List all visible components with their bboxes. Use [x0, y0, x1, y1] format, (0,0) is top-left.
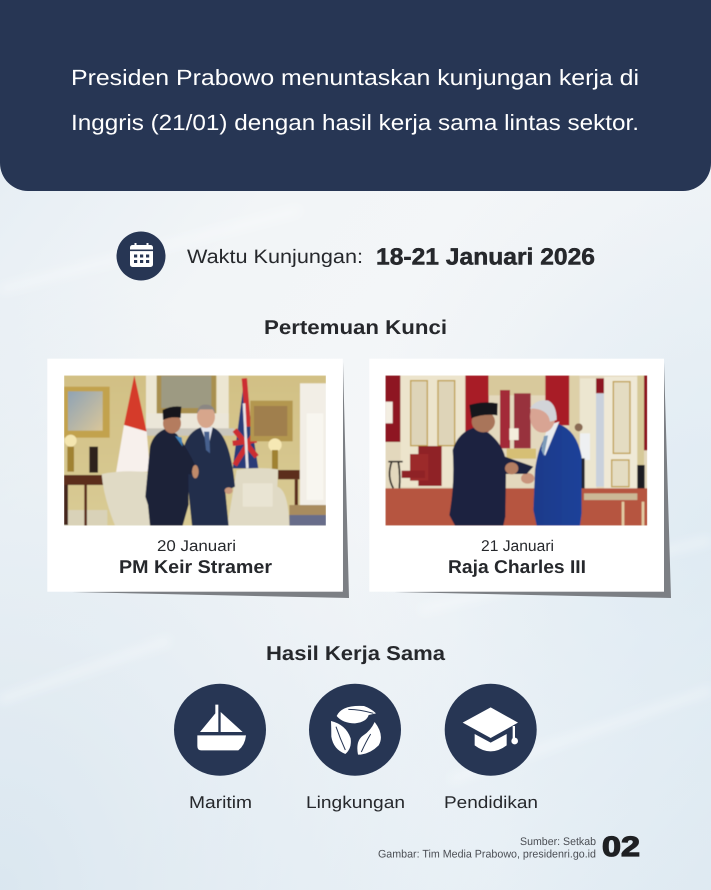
Prabowo	[449, 427, 533, 526]
heading: Pertemuan Kunci: Pertemuan Kunci	[264, 317, 447, 339]
header text: Inggris (21/01) dengan hasil kerja sama lintas sektor.	[71, 110, 639, 135]
source credits: Gambar: Tim Media Prabowo, presidenri.go.id	[378, 848, 596, 860]
icon: calendar	[116, 232, 166, 280]
visit label: Waktu Kunjungan:	[187, 246, 363, 268]
header text	[71, 65, 639, 135]
label: Pendidikan: Pendidikan	[444, 793, 538, 812]
icon: three leaves	[309, 684, 401, 776]
photo: Prabowo and Keir Starmer	[64, 375, 326, 526]
icon: graduation cap	[445, 684, 537, 776]
panel: meeting card 1	[47, 359, 349, 598]
caption name: PM Keir Stramer	[119, 556, 272, 577]
caption date: 20 Januari	[157, 538, 236, 555]
page number: 02	[602, 831, 640, 862]
photo: Prabowo and Raja Charles	[385, 375, 647, 526]
label: Lingkungan: Lingkungan	[306, 793, 405, 812]
man left	[145, 429, 195, 526]
header text: Presiden Prabowo menuntaskan kunjungan kerja di	[71, 65, 639, 90]
header banner	[0, 0, 711, 191]
panel: meeting card 2	[369, 359, 671, 598]
caption date: 21 Januari	[481, 538, 554, 555]
source credits	[378, 836, 596, 860]
visit dates: 18-21 Januari 2026	[376, 244, 595, 270]
source credits: Sumber: Setkab	[520, 836, 596, 848]
label: Maritim: Maritim	[189, 793, 252, 812]
visit date row	[116, 232, 595, 280]
Charles	[533, 424, 582, 526]
icon: sailboat	[174, 684, 266, 776]
man right	[184, 427, 235, 526]
caption name: Raja Charles III	[448, 556, 586, 577]
heading: Hasil Kerja Sama: Hasil Kerja Sama	[266, 643, 446, 665]
